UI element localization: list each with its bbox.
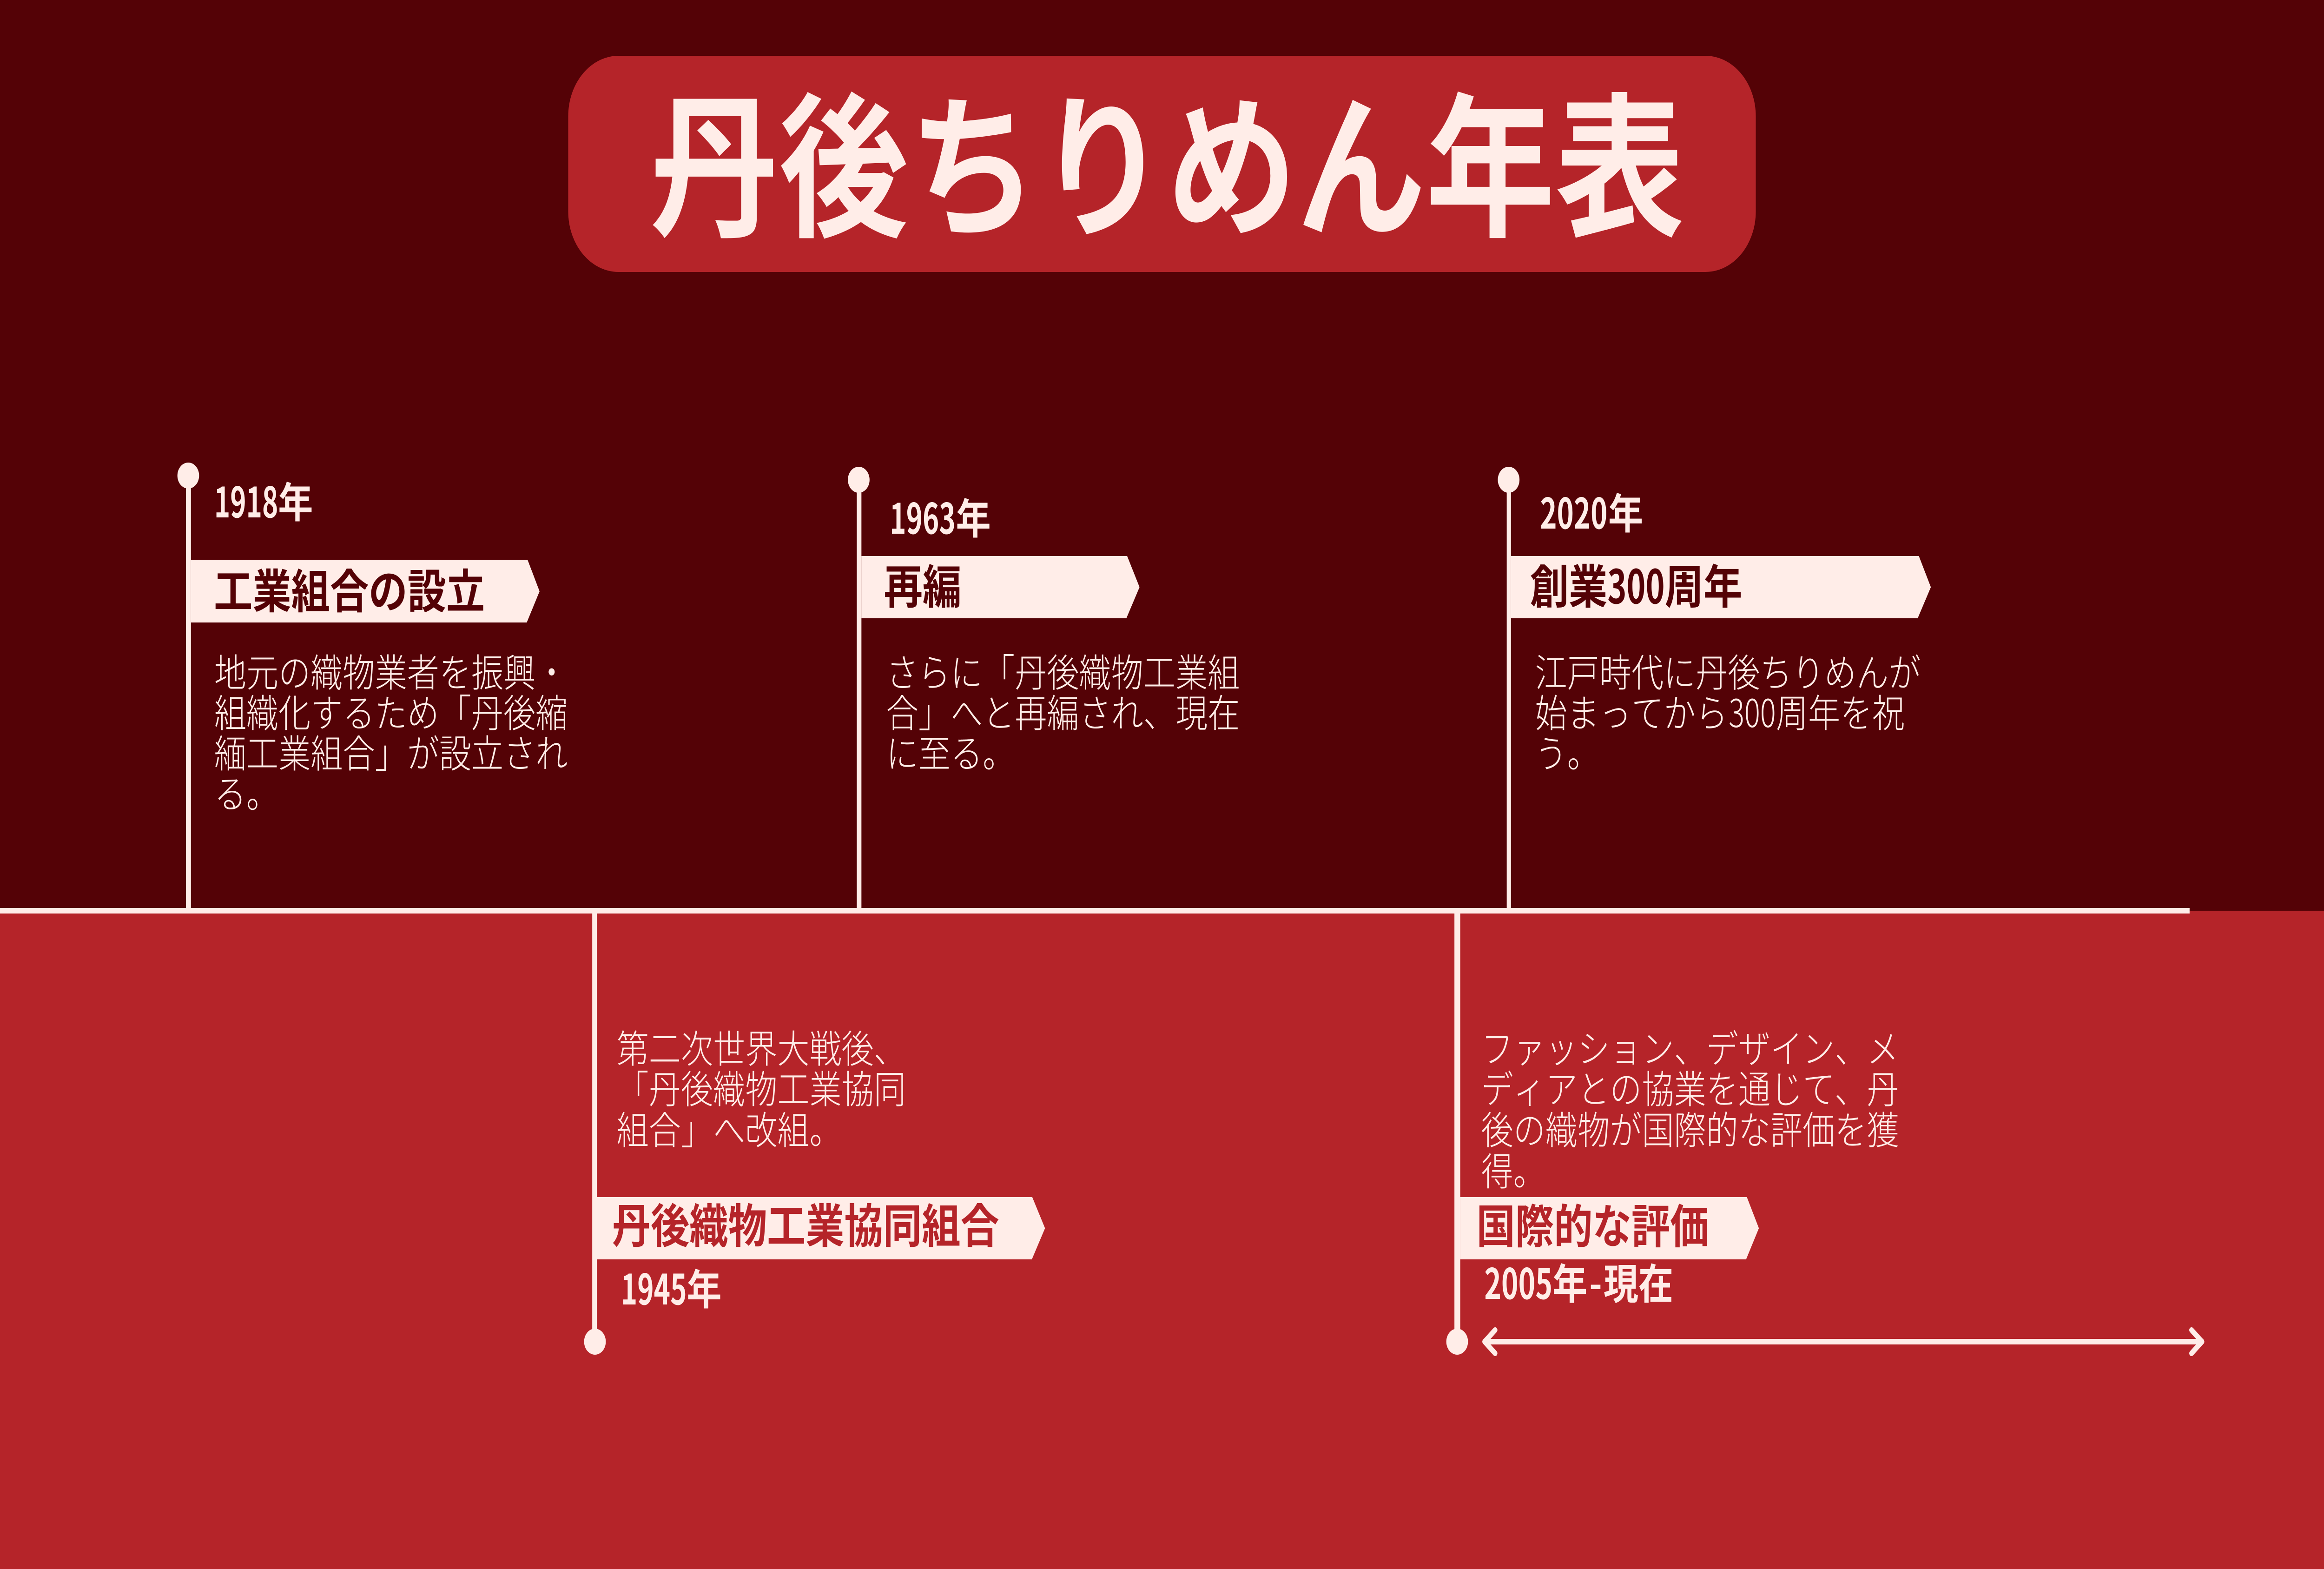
description: 得。 (1481, 1141, 1545, 1197)
timeline axis (0, 908, 2190, 914)
year: 2005年-現在: 年 (1552, 1251, 1587, 1311)
year: 2005年-現在: 現在 (1604, 1251, 1673, 1311)
year: 2020年: 2020 (1540, 480, 1607, 541)
description (1481, 1018, 1899, 1197)
description: さらに「丹後織物工業組 (886, 642, 1240, 698)
description (617, 1018, 906, 1156)
description: 300 (1729, 682, 1776, 739)
description: 第二次世界大戦後、 (617, 1018, 906, 1074)
description: 地元の織物業者を振興・ (214, 642, 568, 698)
panel: 1963 (848, 467, 1240, 909)
year: 1918年: 1918 (214, 469, 278, 530)
description: 組合」へ改組。 (617, 1099, 842, 1156)
title block (568, 44, 1756, 272)
description: 周年を祝 (1776, 682, 1904, 739)
description: る。 (214, 763, 278, 820)
description: う。 (1535, 723, 1599, 779)
banner: 創業300周年: 創業 (1530, 549, 1607, 617)
description: 組織化するため「丹後縮 (214, 682, 568, 739)
year: 1963年: 1963 (890, 485, 956, 546)
description (1535, 642, 1921, 779)
stem and dot (848, 467, 870, 909)
year: 1945年: 1945 (621, 1256, 687, 1317)
description: ディアとの協業を通じて、丹 (1481, 1059, 1899, 1115)
description (886, 642, 1240, 779)
banner: 丹後織物工業協同組合: 丹後織物工業協同組合 (612, 1189, 999, 1256)
banner: 国際的な評価: 国際的な評価 (1477, 1189, 1709, 1257)
year: 2005年-現在 (1484, 1251, 1673, 1311)
title text: 丹後ちりめん年表 (650, 44, 1684, 269)
description: 緬工業組合」が設立され (214, 723, 568, 779)
banner: 再編: 再編 (884, 549, 961, 617)
background: lower red band (0, 911, 2324, 1569)
description: 合」へと再編され、現在 (886, 682, 1240, 739)
title pill (568, 56, 1756, 272)
description: 後の織物が国際的な評価を獲 (1481, 1099, 1899, 1156)
panel: 2005-present (1446, 913, 2202, 1355)
banner: 再編 (861, 549, 1140, 618)
stem and dot (1498, 467, 1519, 909)
stem and dot (178, 463, 199, 909)
stem and dot (1446, 913, 1468, 1355)
banner: 創業300周年 (1511, 549, 1931, 618)
description (214, 642, 568, 820)
description: 「丹後織物工業協同 (617, 1059, 906, 1115)
background: upper dark band (0, 0, 2324, 911)
description: 江戸時代に丹後ちりめんが (1535, 642, 1921, 698)
panel: 1918 (178, 463, 568, 909)
panel: 2020 (1498, 467, 1931, 909)
panel: 1945 (584, 913, 1045, 1355)
year: 1918年: 年 (278, 469, 313, 530)
banner: 創業300周年: 300 (1607, 549, 1665, 617)
banner: 創業300周年: 周年 (1665, 549, 1742, 617)
stem and dot (584, 913, 606, 1355)
year: 2005年-現在: 2005 (1484, 1251, 1552, 1311)
banner: 工業組合の設立: 工業組合の設立 (214, 554, 485, 622)
description: 始まってから (1535, 682, 1728, 739)
description: に至る。 (886, 723, 1015, 779)
year: 2005年-現在: - (1589, 1251, 1602, 1311)
year: 2020年: 年 (1608, 480, 1643, 541)
year: 1963年: 年 (956, 485, 991, 546)
description: ファッション、デザイン、メ (1481, 1018, 1899, 1074)
year: 1945年: 年 (687, 1256, 721, 1317)
arrow: double-headed duration arrow (1485, 1330, 2202, 1353)
